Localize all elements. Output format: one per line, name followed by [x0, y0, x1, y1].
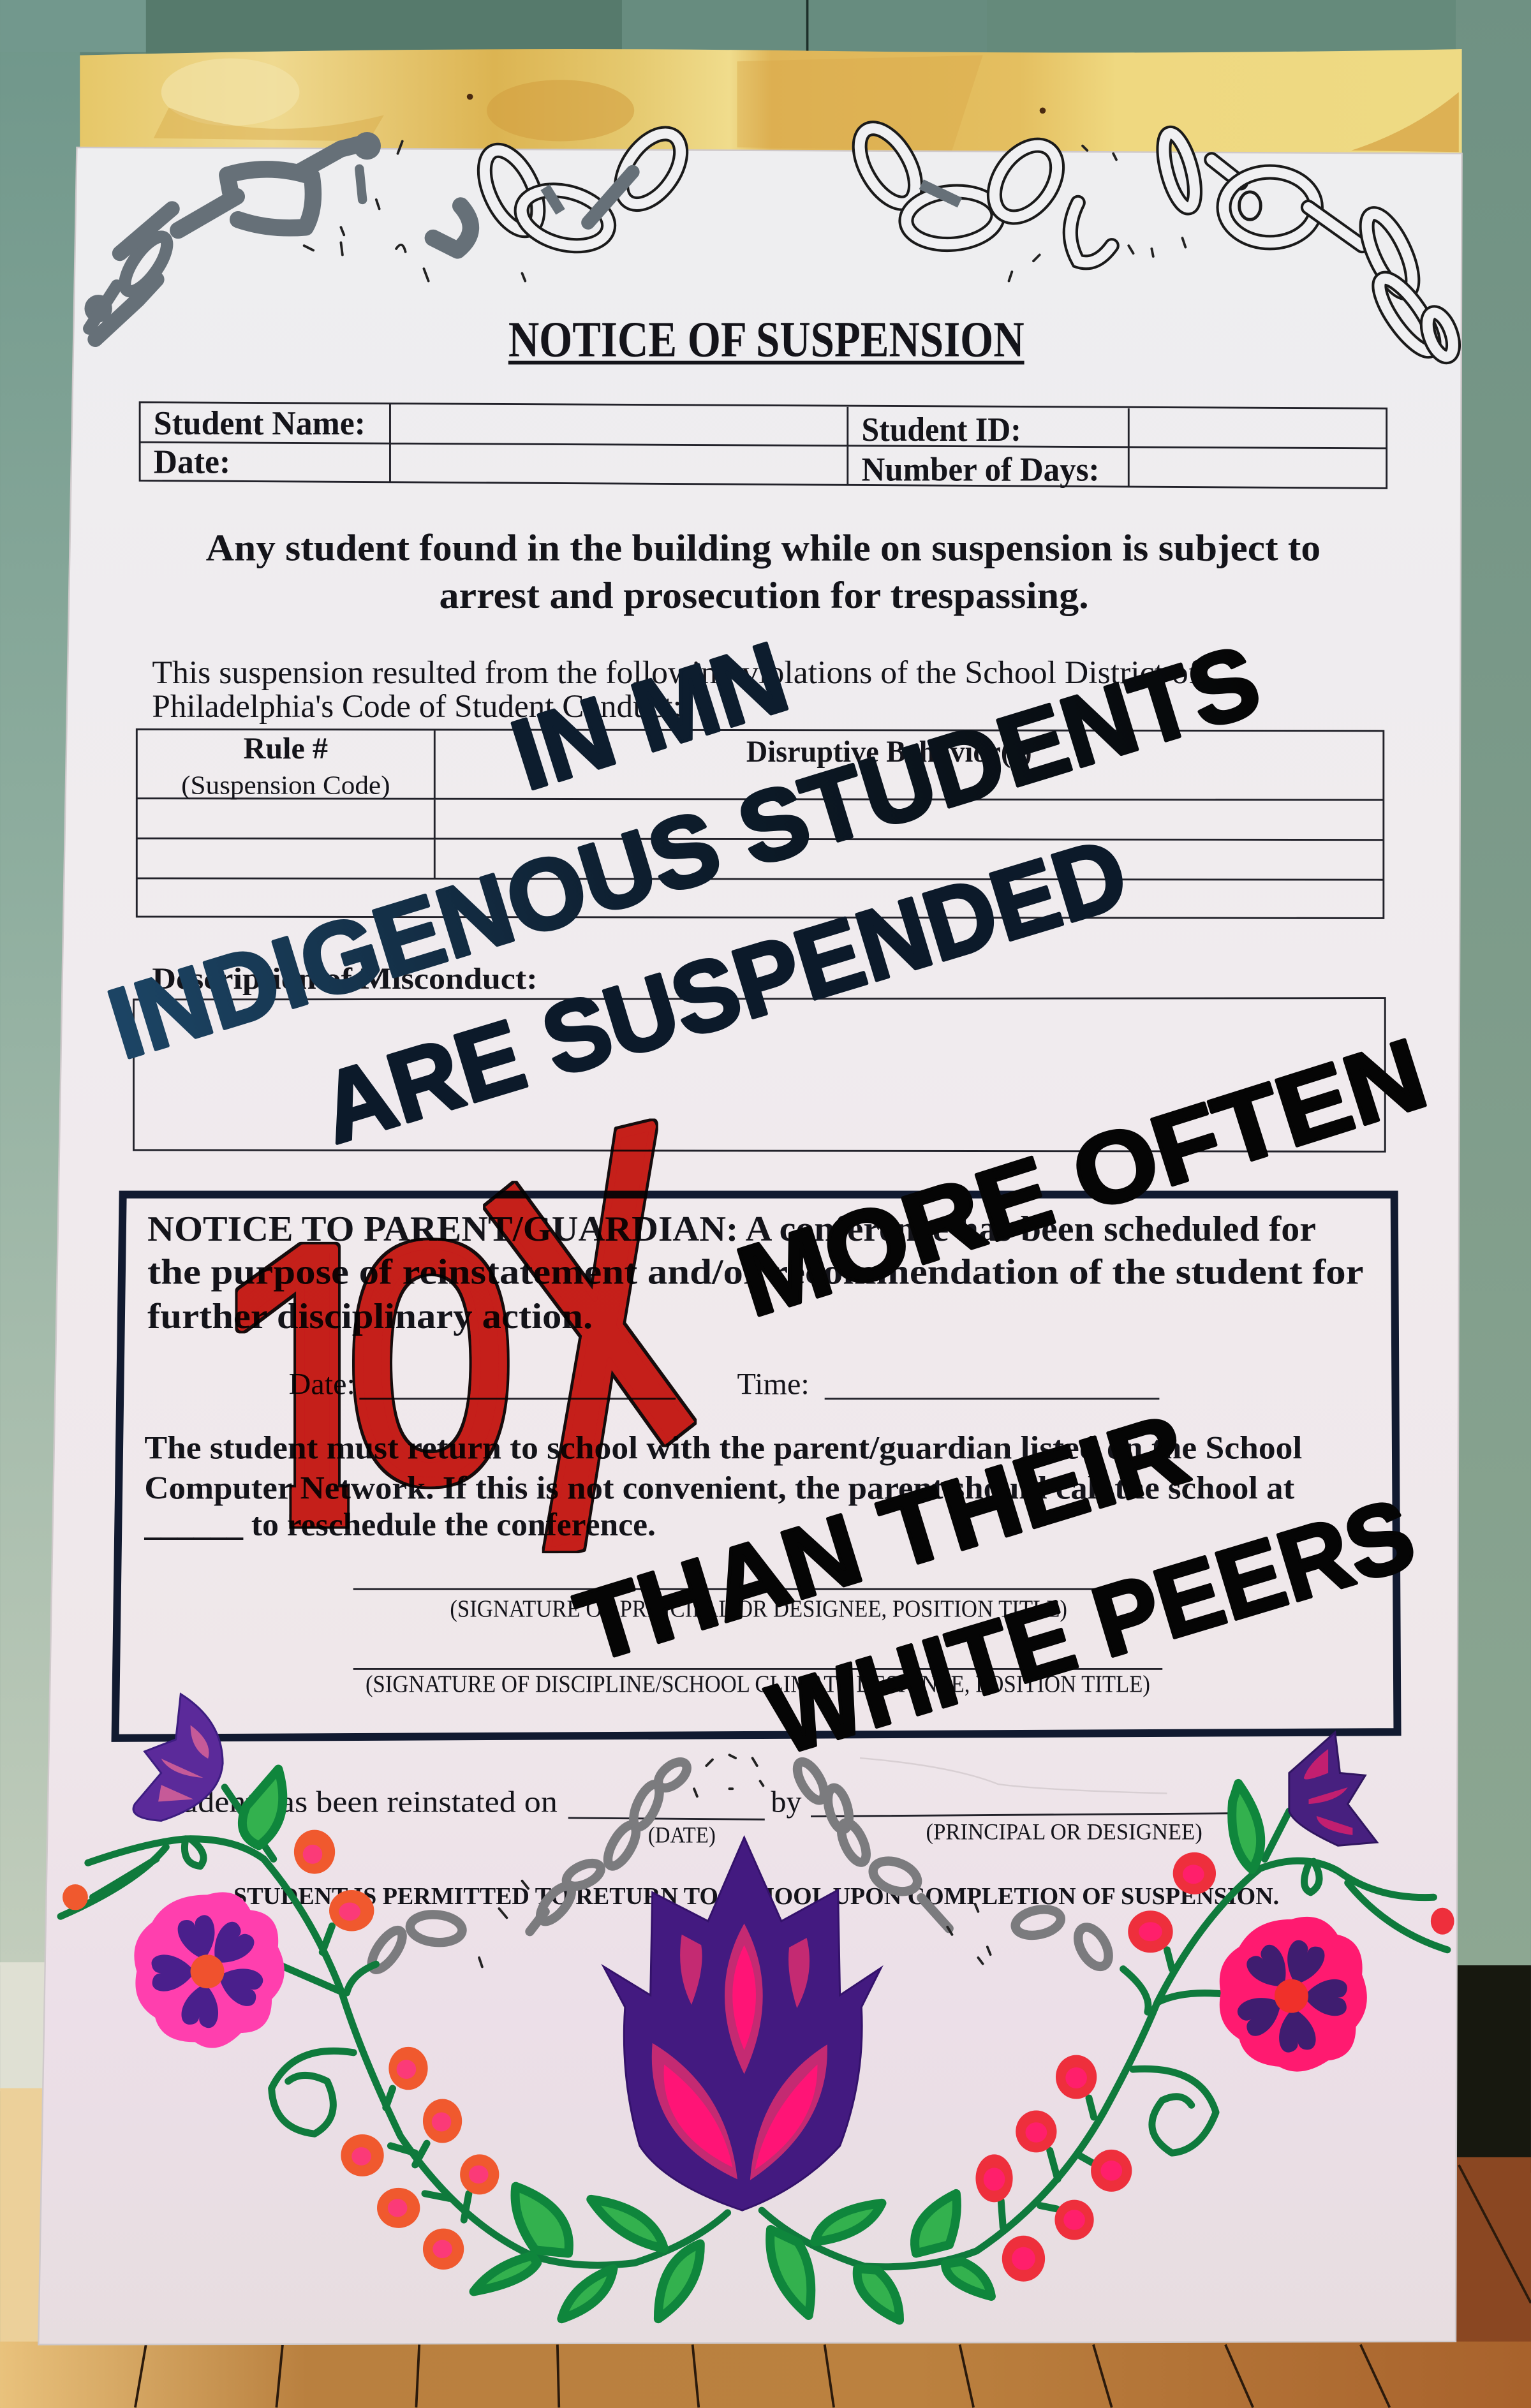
- reinstatement lines: STUDENT IS PERMITTED TO RETURN TO SCHOOL UPON COMPLETION OF SUSPENSION.: [233, 1883, 1279, 1910]
- notice to parent box: Computer Network. If this is not convenient, the parent should call the school at: [144, 1470, 1294, 1505]
- slanted headline: in MN indigenous students are suspended: INDIGENOUS STUDENTS: [96, 624, 1271, 1080]
- violations paragraph: Philadelphia's Code of Student Conduct:: [152, 688, 682, 724]
- title: NOTICE OF SUSPENSION: [508, 311, 1024, 367]
- notice to parent box: Time:: [737, 1368, 810, 1401]
- slanted headline: more often than their white peers: MORE OFTEN: [725, 1017, 1439, 1338]
- student details table: Number of Days:: [861, 451, 1100, 488]
- central tulip: [603, 1838, 881, 2210]
- notice to parent box: Date:: [289, 1368, 355, 1401]
- violations paragraph: [152, 654, 1199, 724]
- reinstatement lines: Student has been reinstated on: [154, 1785, 558, 1819]
- red 10X: [235, 1119, 697, 1554]
- grey broken chain top left: [84, 132, 525, 339]
- notice to parent box: ______ to reschedule the conference.: [144, 1507, 656, 1542]
- reinstatement lines: (DATE): [648, 1822, 716, 1847]
- misconduct box: Description of Misconduct:: [152, 962, 538, 996]
- reinstatement lines: by: [771, 1785, 802, 1819]
- notice to parent box: (SIGNATURE OF DISCIPLINE/SCHOOL CLIMATE DESIGNEE, POSITION TITLE): [366, 1671, 1150, 1698]
- slanted headline: more often than their white peers: WHITE PEERS: [757, 1478, 1426, 1776]
- vines: [61, 1787, 1447, 2267]
- notice to parent box: [115, 1195, 1398, 1738]
- purple side tulips: [133, 1694, 1377, 1845]
- rule table: Disruptive Behavior(s): [746, 735, 1032, 769]
- trespassing warning: arrest and prosecution for trespassing.: [439, 574, 1089, 616]
- student details table: Date:: [154, 443, 230, 480]
- rule table: (Suspension Code): [181, 771, 390, 799]
- student details table: Student Name:: [154, 405, 366, 442]
- lower grey broken chains: [366, 1755, 1114, 1974]
- right pink flower: [1220, 1917, 1367, 2072]
- slanted headline: in MN indigenous students are suspended: IN MN: [499, 621, 800, 811]
- student details table: Student ID:: [861, 411, 1021, 448]
- notice to parent box: the purpose of reinstatement and/or recommendation of the student for: [147, 1252, 1364, 1292]
- violations paragraph: This suspension resulted from the following violations of the School District of: [152, 654, 1199, 690]
- rule table: [137, 729, 1384, 918]
- slanted headline: in MN indigenous students are suspended: ARE SUSPENDED: [309, 817, 1139, 1165]
- berries: [63, 1830, 1454, 2282]
- outlined broken chain top right: [848, 119, 1458, 360]
- trespassing warning: [206, 527, 1320, 616]
- rule table: Rule #: [244, 732, 328, 765]
- slanted headline: more often than their white peers: [565, 1017, 1439, 1776]
- reinstatement lines: (PRINCIPAL OR DESIGNEE): [926, 1819, 1202, 1845]
- wood strip at top of board: [80, 49, 1462, 154]
- left pink flower: [134, 1892, 285, 2048]
- trespassing warning: Any student found in the building while on suspension is subject to: [206, 527, 1320, 569]
- red 10X: 0: [347, 1176, 515, 1549]
- red 10X: 1: [206, 1164, 415, 1606]
- student details table: [140, 403, 1387, 488]
- red 10X: X: [420, 1002, 785, 1672]
- notice to parent box: further disciplinary action.: [147, 1297, 593, 1336]
- leaves: [242, 1769, 1261, 2320]
- misconduct box: [133, 962, 1385, 1151]
- outlined broken chain top centre: [474, 123, 693, 255]
- notice to parent box: NOTICE TO PARENT/GUARDIAN: A conference has been scheduled for: [147, 1209, 1316, 1249]
- notice to parent box: (SIGNATURE OF PRINCIPAL OR DESIGNEE, POSITION TITLE): [450, 1596, 1067, 1623]
- reinstatement lines: [154, 1758, 1279, 1910]
- notice to parent box: The student must return to school with the parent/guardian listed on the School: [144, 1430, 1302, 1466]
- slanted headline: more often than their white peers: THAN THEIR: [565, 1392, 1200, 1683]
- floral beadwork design: [61, 1694, 1454, 2320]
